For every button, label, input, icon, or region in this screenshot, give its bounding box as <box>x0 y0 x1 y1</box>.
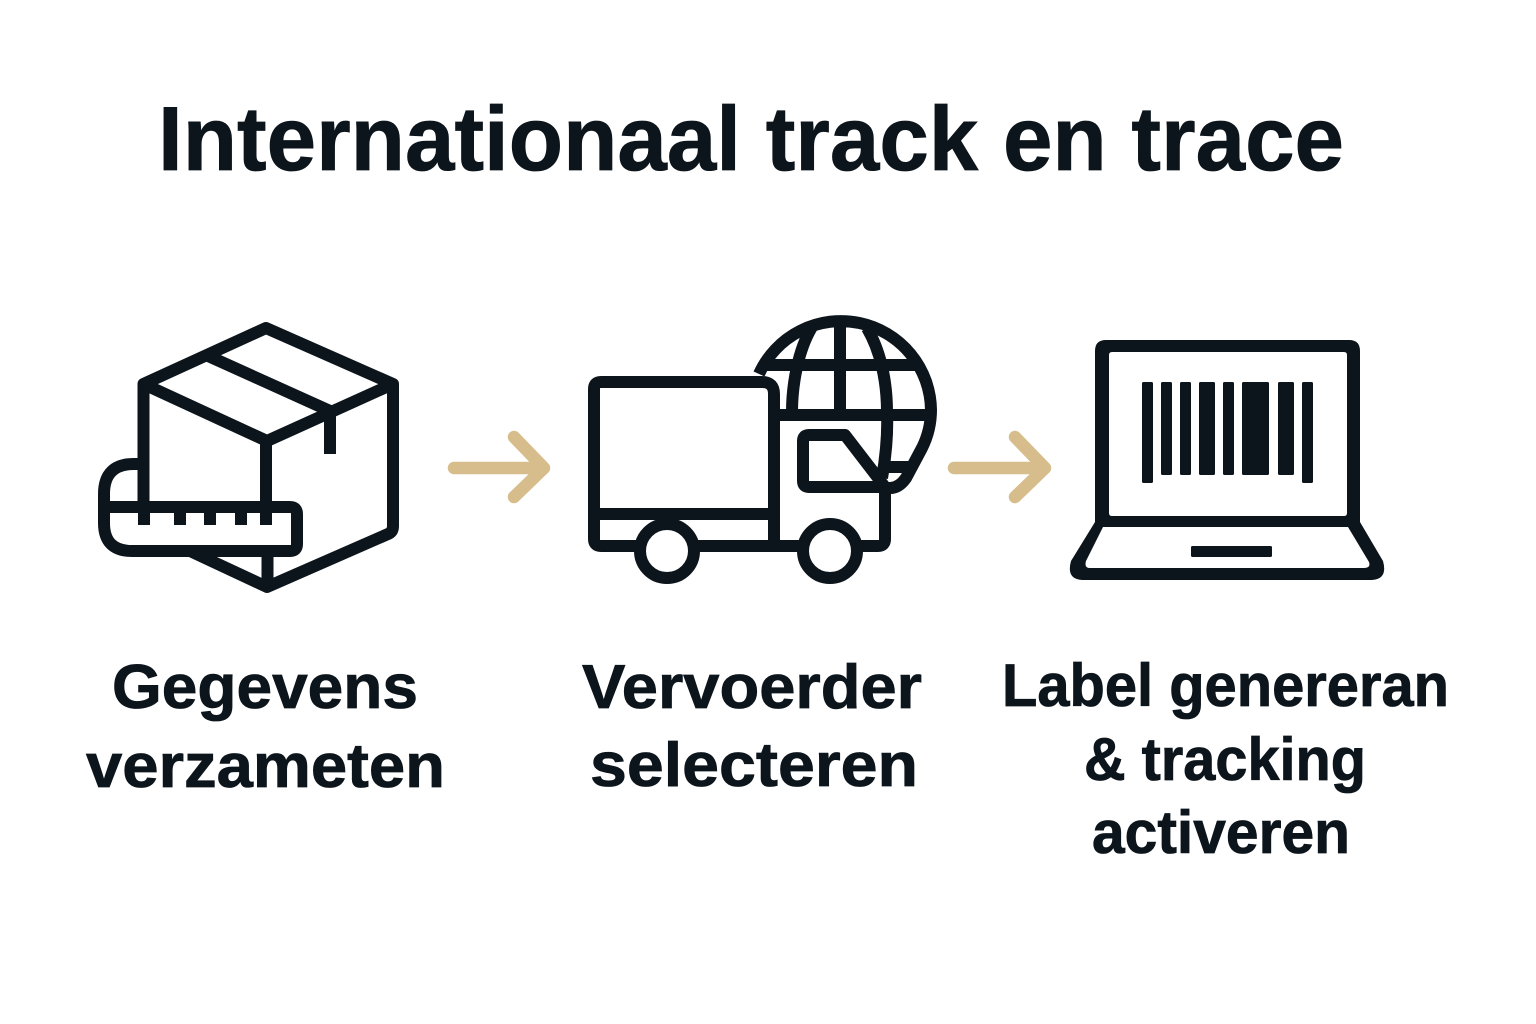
label step 1: Gegevens <box>112 653 418 722</box>
label step 1: verzameten <box>86 732 445 801</box>
truck cargo box <box>594 382 802 546</box>
step 3: icon laptop with barcode <box>1070 340 1384 580</box>
box outline: top and right side <box>144 328 393 587</box>
box top inner edges <box>144 355 393 587</box>
arrow 2 <box>954 437 1045 497</box>
ruler with measuring ticks <box>104 464 297 551</box>
laptop screen and base <box>1070 340 1384 580</box>
title: Internationaal track en trace <box>158 89 1344 190</box>
label step 1 <box>86 653 445 801</box>
barcode <box>1142 382 1313 483</box>
step 1: icon box with ruler <box>104 328 393 587</box>
trackpad <box>1191 546 1272 557</box>
label step 3: & tracking <box>1084 726 1366 793</box>
label step 3 <box>1002 652 1449 866</box>
label step 2: selecteren <box>590 731 918 800</box>
label step 2: Vervoerder <box>582 653 922 722</box>
globe <box>759 320 931 488</box>
label step 3: activeren <box>1092 799 1350 866</box>
step 2: icon truck with globe <box>594 320 931 578</box>
label step 3: Label genereran <box>1002 652 1449 719</box>
truck wheels <box>640 524 694 578</box>
label step 2 <box>582 653 922 800</box>
truck cab and window <box>803 435 885 546</box>
arrow 1 <box>454 437 544 497</box>
